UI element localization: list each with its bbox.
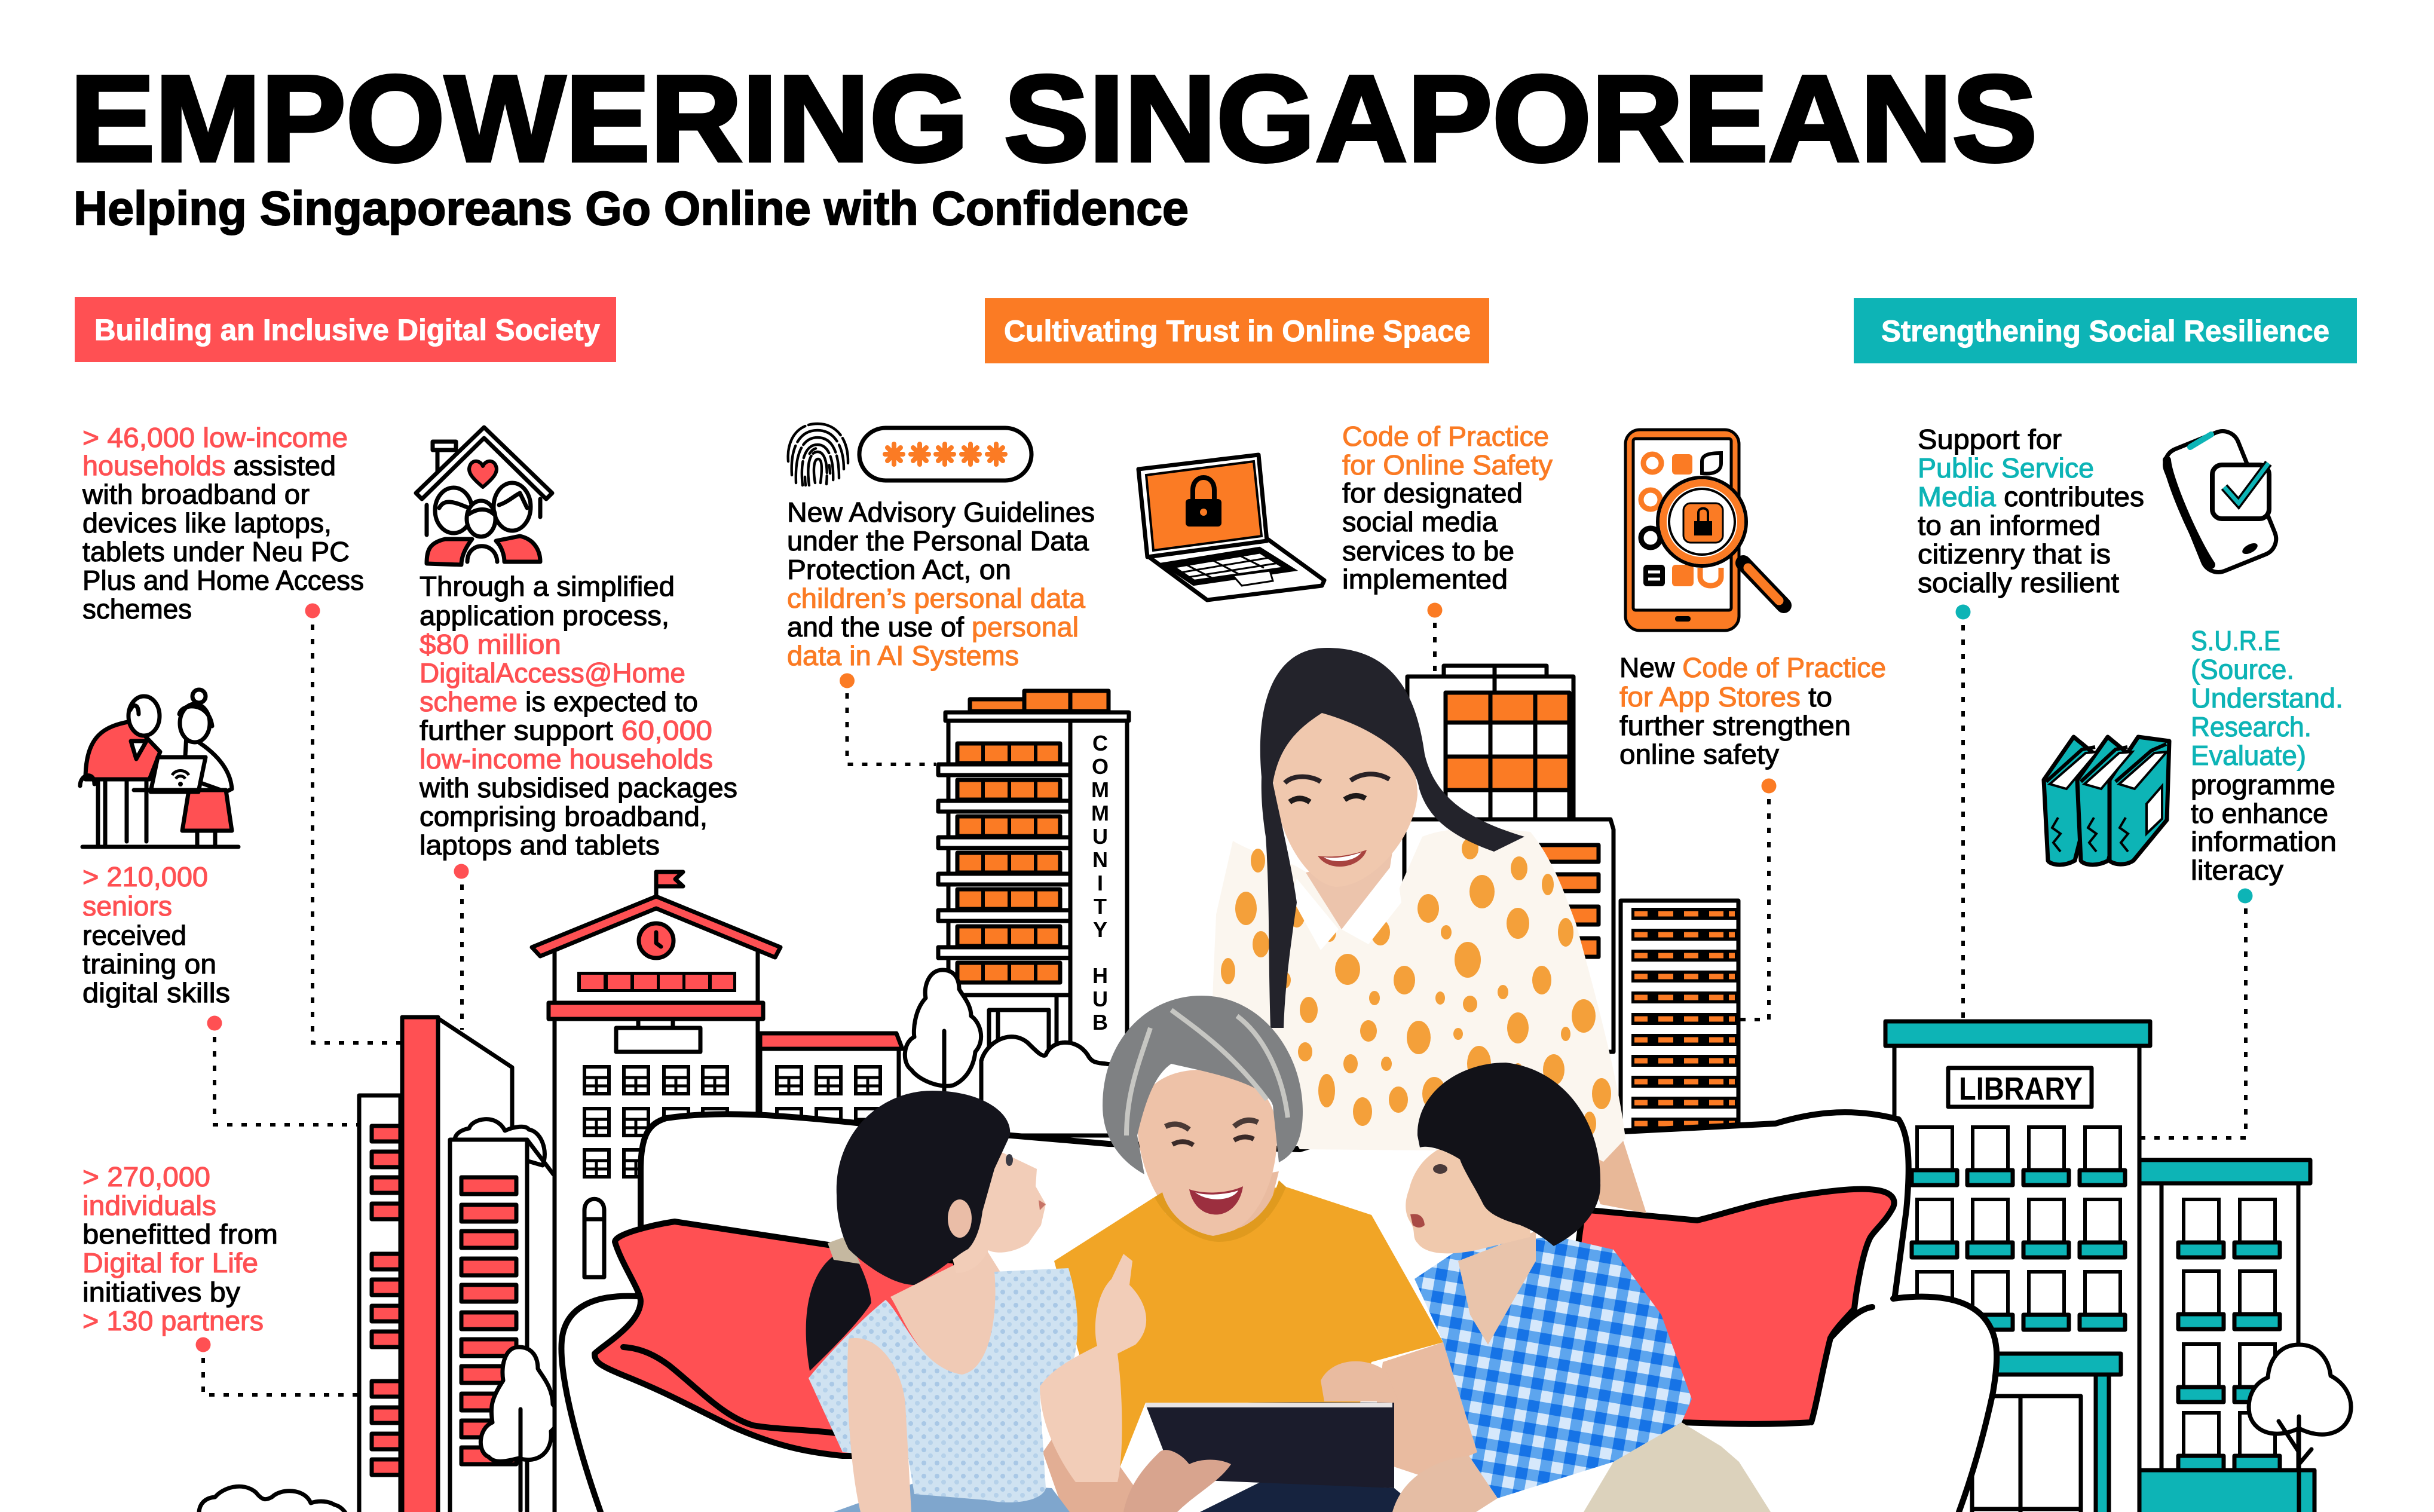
text: DigitalAccess@Home: laptops and tablets xyxy=(420,830,660,861)
text: DigitalAccess@Home: low-income households xyxy=(420,743,713,775)
text: DigitalAccess@Home: comprising broadband, xyxy=(420,801,708,832)
text: DigitalAccess@Home: $80 million xyxy=(420,629,561,660)
hub lettering: C xyxy=(1092,731,1108,755)
text: 46,000 households: devices like laptops, xyxy=(82,507,332,538)
icon: password field xyxy=(859,428,1031,480)
text: advisory guidelines xyxy=(787,497,1095,688)
text: code of practice online safety: Code of Practice xyxy=(1342,421,1549,452)
text: 210,000 seniors: seniors xyxy=(82,890,172,922)
text: code of practice app stores: New Code of Practice xyxy=(1619,652,1886,683)
text: S.U.R.E programme: Evaluate) xyxy=(2191,740,2306,771)
heading: inclusive digital society: Building an Inclusive Digital Society xyxy=(94,313,600,347)
library sign: LIBRARY xyxy=(1959,1071,2083,1107)
text: 270,000 individuals xyxy=(82,1161,278,1352)
photo: mother standing xyxy=(1210,648,1646,1213)
text: code of practice online safety xyxy=(1342,421,1553,618)
building: orange block right of mother xyxy=(1404,666,1614,1052)
building: red towers left xyxy=(359,1017,553,1512)
pillow: left red xyxy=(595,1222,956,1456)
connector dotted lines xyxy=(203,623,2246,1395)
hub lettering: U xyxy=(1092,987,1108,1011)
text: code of practice online safety: for Online Safety xyxy=(1342,449,1553,480)
text: public service media: Public Service xyxy=(1918,452,2094,483)
text: S.U.R.E programme: to enhance xyxy=(2191,798,2328,829)
text: advisory guidelines: and the use of personal xyxy=(787,611,1079,642)
text: 46,000 households: schemes xyxy=(82,593,192,625)
tree: left xyxy=(480,1347,558,1511)
text: 46,000 households: households assisted xyxy=(82,450,336,481)
photo: grandmother xyxy=(1043,996,1477,1512)
icon: seniors with laptop xyxy=(80,690,238,847)
heading: trust online xyxy=(985,298,1489,363)
text: 210,000 seniors: training on xyxy=(82,948,216,980)
text: code of practice online safety: services to be xyxy=(1342,535,1514,567)
text: public service media: to an informed xyxy=(1918,510,2101,541)
text: DigitalAccess@Home: with subsidised packages xyxy=(419,772,737,803)
text: 210,000 seniors: digital skills xyxy=(82,977,230,1008)
heading: social resilience: Strengthening Social Resilience xyxy=(1881,314,2329,348)
building: community hub xyxy=(938,691,1129,1079)
building: striped tower xyxy=(1621,901,1738,1140)
text: advisory guidelines: under the Personal Data xyxy=(787,525,1089,556)
text: advisory guidelines: data in AI Systems xyxy=(787,640,1019,671)
text: DigitalAccess@Home: application process, xyxy=(420,600,669,631)
text: DigitalAccess@Home: Through a simplified xyxy=(420,571,675,602)
building: side red roof xyxy=(760,1033,902,1195)
hub lettering: B xyxy=(1092,1010,1108,1034)
photo: boy xyxy=(1392,1063,1771,1512)
icon: phone with magnifier xyxy=(1625,430,1784,630)
text: public service media: Media contributes xyxy=(1918,481,2144,512)
heading: social resilience xyxy=(1854,298,2357,363)
text: code of practice app stores: for App Stores to xyxy=(1619,681,1832,712)
icon: phone with checkmark xyxy=(2160,426,2281,577)
hub lettering: M xyxy=(1091,801,1109,825)
text: DigitalAccess@Home: scheme is expected to xyxy=(420,686,698,717)
subtitle: Helping Singaporeans Go Online with Confidence xyxy=(74,182,1189,235)
text: code of practice app stores: online safety xyxy=(1619,739,1779,770)
icon: three books xyxy=(2044,737,2169,865)
heading: trust online: Cultivating Trust in Online Space xyxy=(1004,314,1471,348)
icon: fingerprint xyxy=(788,424,848,485)
photo: girl xyxy=(806,1091,1146,1512)
pillow: right red xyxy=(1554,1189,1894,1424)
text: code of practice online safety: for designated xyxy=(1342,478,1523,509)
building: library xyxy=(1885,1021,2314,1512)
hub lettering: U xyxy=(1092,824,1108,849)
text: S.U.R.E programme xyxy=(2191,625,2343,904)
text: public service media: citizenry that is xyxy=(1918,538,2111,570)
building: clock tower xyxy=(532,872,780,1512)
icon: house with family xyxy=(416,427,552,565)
hub lettering: T xyxy=(1094,894,1107,919)
text: code of practice online safety: social media xyxy=(1342,506,1498,537)
text: 210,000 seniors: received xyxy=(82,920,186,951)
text: DigitalAccess@Home xyxy=(419,571,737,879)
title: EMPOWERING SINGAPOREANS xyxy=(70,50,2037,187)
text: S.U.R.E programme: (Source. xyxy=(2191,654,2294,685)
text: 270,000 individuals: initiatives by xyxy=(82,1277,240,1308)
hub lettering: Y xyxy=(1093,917,1107,942)
text: S.U.R.E programme: Understand. xyxy=(2191,682,2343,714)
hub lettering: O xyxy=(1092,754,1109,779)
icon: laptop with padlock xyxy=(1138,455,1324,600)
text: advisory guidelines: children’s personal data xyxy=(787,583,1085,614)
text: public service media xyxy=(1918,424,2144,619)
text: 270,000 individuals: > 130 partners xyxy=(82,1305,264,1336)
text: 210,000 seniors xyxy=(82,861,230,1030)
heading: inclusive digital society xyxy=(75,297,616,362)
sofa xyxy=(561,1112,1997,1512)
hub lettering: N xyxy=(1092,847,1108,872)
text: S.U.R.E programme: literacy xyxy=(2191,855,2283,886)
hub lettering: M xyxy=(1091,778,1109,802)
text: 46,000 households: Plus and Home Access xyxy=(82,565,364,596)
text: advisory guidelines: New Advisory Guidelines xyxy=(787,497,1095,528)
text: public service media: socially resilient xyxy=(1918,567,2119,598)
text: 46,000 households: > 46,000 low-income xyxy=(82,422,348,453)
tree and cloud: centre xyxy=(905,970,1119,1135)
hub lettering: H xyxy=(1092,963,1108,988)
text: S.U.R.E programme: information xyxy=(2191,826,2337,857)
text: DigitalAccess@Home: DigitalAccess@Home xyxy=(420,657,685,688)
hub lettering: I xyxy=(1097,871,1103,895)
text: public service media: Support for xyxy=(1918,424,2062,455)
photo: tablet xyxy=(1123,1361,1398,1512)
text: S.U.R.E programme: S.U.R.E xyxy=(2191,625,2280,656)
text: 46,000 households xyxy=(82,422,364,625)
text: 46,000 households: tablets under Neu PC xyxy=(82,536,350,567)
text: 270,000 individuals: Digital for Life xyxy=(82,1247,258,1278)
text: 210,000 seniors: > 210,000 xyxy=(82,861,208,892)
text: S.U.R.E programme: Research. xyxy=(2191,711,2311,742)
tree: right xyxy=(2249,1345,2351,1512)
hub lettering xyxy=(1091,731,1109,1034)
text: code of practice online safety: implemented xyxy=(1342,564,1508,595)
text: 270,000 individuals: individuals xyxy=(82,1190,216,1221)
text: 270,000 individuals: > 270,000 xyxy=(82,1161,210,1192)
text: code of practice app stores xyxy=(1619,652,1886,794)
cloud: bottom left xyxy=(199,1486,347,1512)
text: S.U.R.E programme: programme xyxy=(2191,769,2335,800)
shirt dots xyxy=(1221,838,1611,1135)
text: 46,000 households: with broadband or xyxy=(82,479,310,510)
text: advisory guidelines: Protection Act, on xyxy=(787,554,1011,585)
text: DigitalAccess@Home: further support 60,000 xyxy=(420,715,712,746)
text: 270,000 individuals: benefitted from xyxy=(82,1219,278,1250)
text: code of practice app stores: further strengthen xyxy=(1619,710,1851,741)
